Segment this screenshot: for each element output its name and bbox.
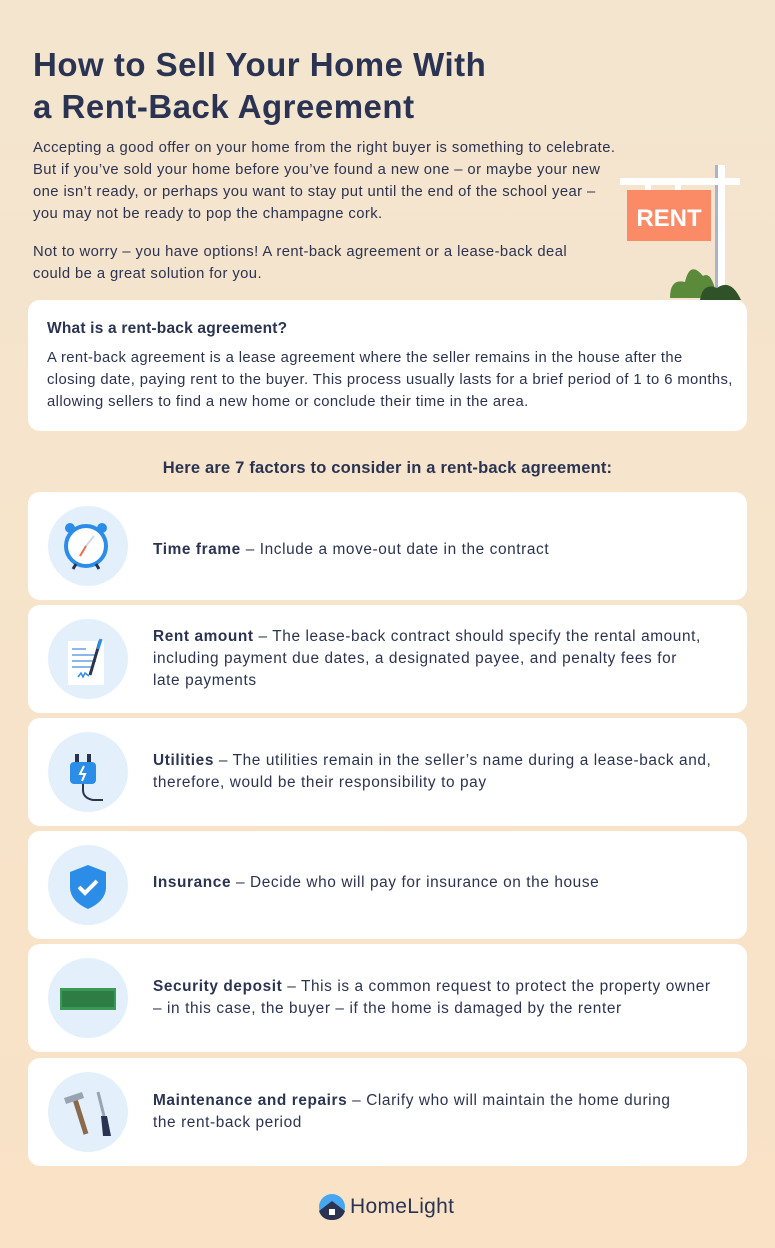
intro paragraph 2: Not to worry – you have options! A rent-back agreement or a lease-back deal — [33, 244, 567, 260]
logo: HomeLight — [319, 1194, 454, 1220]
card: utilities — [28, 718, 747, 826]
intro paragraph: Accepting a good offer on your home from the right buyer is something to celebrate. — [33, 140, 615, 156]
card: time frame: Time frame – Include a move-out date in the contract — [153, 541, 549, 558]
logo: HomeLight: HomeLight — [350, 1195, 454, 1218]
card heading: What is a rent-back agreement? — [47, 320, 287, 337]
card: rent amount — [28, 605, 747, 713]
card: insurance — [28, 831, 747, 939]
card: security deposit — [28, 944, 747, 1052]
card: insurance: Insurance – Decide who will pay for insurance on the house — [153, 874, 599, 891]
intro paragraph: one isn’t ready, or perhaps you want to stay put until the end of the school year – — [33, 184, 596, 200]
card: maintenance and repairs — [28, 1058, 747, 1166]
card text: A rent-back agreement is a lease agreement where the seller remains in the house after the — [47, 350, 683, 366]
icon: shield — [48, 845, 128, 925]
intro paragraph — [33, 140, 615, 222]
intro paragraph 2 — [33, 244, 567, 282]
intro paragraph 2: could be a great solution for you. — [33, 266, 262, 282]
icon: cash — [48, 958, 128, 1038]
card: rent amount: late payments — [153, 672, 257, 689]
section heading: Here are 7 factors to consider in a rent-back agreement: — [163, 459, 612, 477]
card: maintenance and repairs: the rent-back period — [153, 1114, 302, 1131]
card: security deposit: Security deposit – This is a common request to protect the property owner — [153, 978, 711, 995]
card text: closing date, paying rent to the buyer. This process usually lasts for a brief period of 1 to 6 months, — [47, 372, 733, 388]
card: what is a rent-back agreement — [28, 300, 747, 431]
icon: rent sign: RENT — [636, 205, 702, 232]
intro paragraph: But if you’ve sold your home before you’ve found a new one – or maybe your new — [33, 162, 600, 178]
card: utilities: Utilities – The utilities remain in the seller’s name during a lease-back and, — [153, 752, 711, 769]
title: How to Sell Your Home With — [33, 46, 486, 83]
card: rent amount: Rent amount – The lease-back contract should specify the rental amount, — [153, 628, 701, 645]
intro paragraph: you may not be ready to pop the champagne cork. — [33, 206, 383, 222]
icon: tools — [48, 1072, 128, 1152]
card: time frame — [28, 492, 747, 600]
icon: plug — [48, 732, 128, 812]
card: rent amount: including payment due dates, a designated payee, and penalty fees for — [153, 650, 677, 667]
card: utilities: therefore, would be their responsibility to pay — [153, 774, 487, 791]
card: security deposit: – in this case, the buyer – if the home is damaged by the renter — [153, 1000, 622, 1017]
card text — [47, 350, 733, 410]
card text: allowing sellers to find a new home or conclude their time in the area. — [47, 394, 529, 410]
title: a Rent-Back Agreement — [33, 88, 415, 125]
card: maintenance and repairs: Maintenance and repairs – Clarify who will maintain the home during — [153, 1092, 671, 1109]
icon: alarm clock — [48, 506, 128, 586]
title — [33, 46, 486, 125]
icon: rent sign — [620, 165, 741, 300]
icon: contract — [48, 619, 128, 699]
